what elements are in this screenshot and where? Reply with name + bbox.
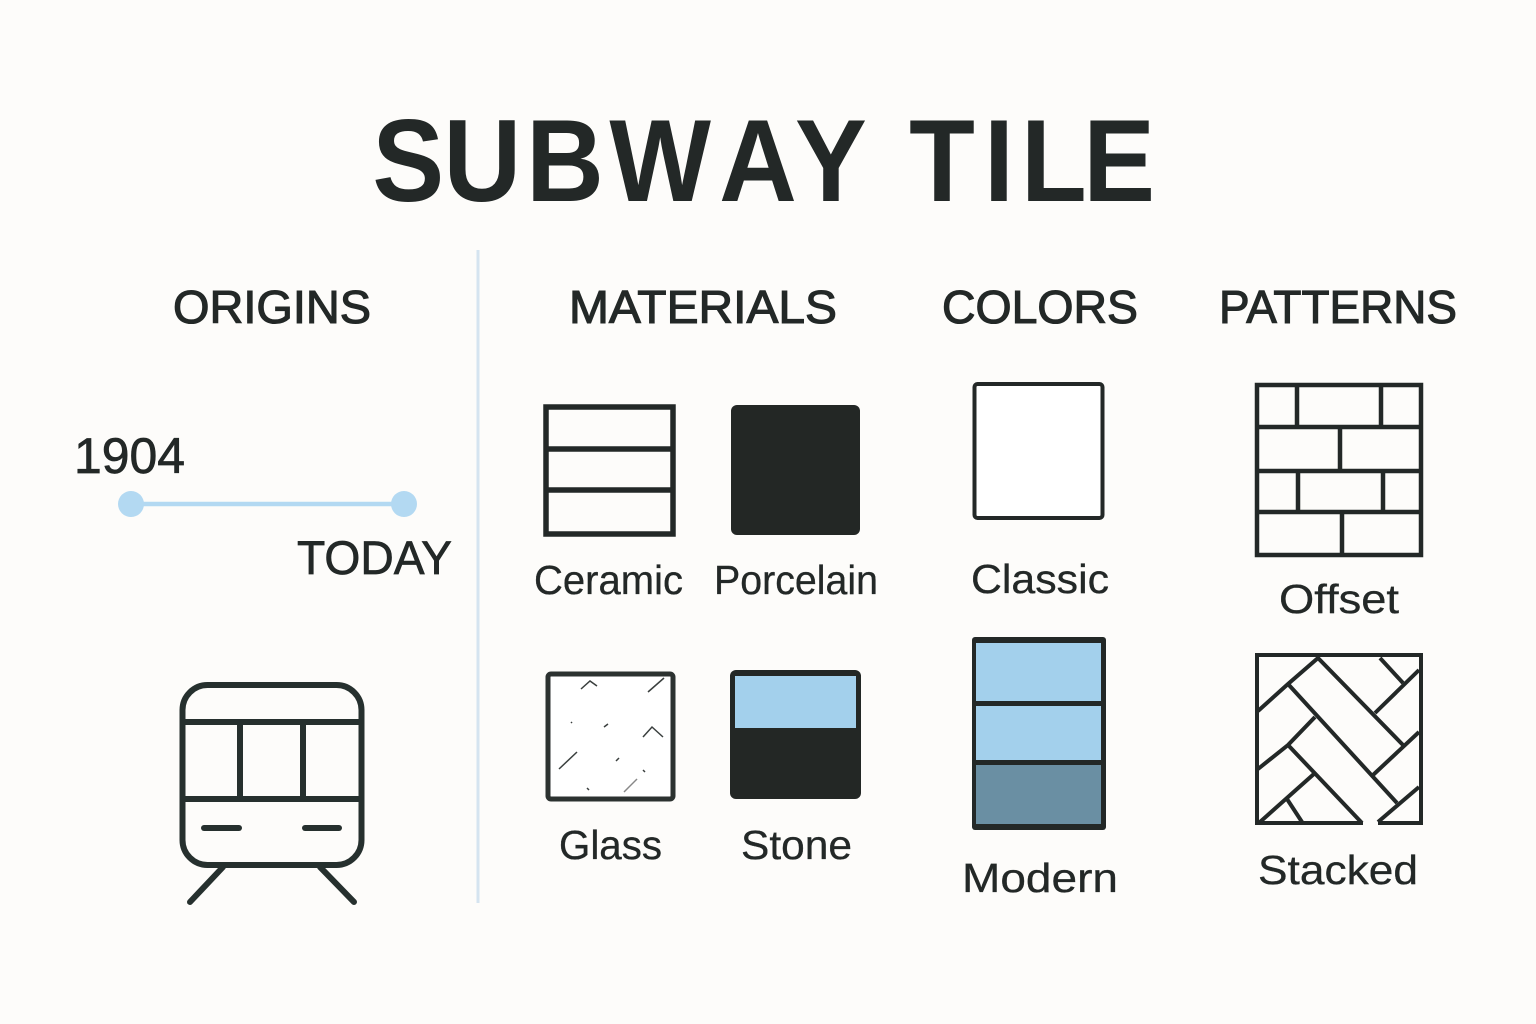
panel: materials [534,281,878,868]
label: modern: Modern [962,855,1118,901]
swatch: ceramic [546,407,673,534]
swatch: stone [730,670,861,799]
label: glass: Glass [559,822,662,868]
panel: origins [74,281,452,902]
label: stone: Stone [741,822,852,868]
pattern: stacked [1257,655,1421,823]
pattern: offset [1257,385,1421,555]
heading: patterns: PATTERNS [1219,281,1457,333]
panel: patterns [1219,281,1457,893]
timeline: 1904 to today [74,428,452,584]
label: stacked: Stacked [1258,847,1418,893]
swatch: glass [548,674,673,799]
timeline start year: 1904 [74,428,185,484]
title: SUBWAY TILE [372,95,1155,226]
divider between origins and the tile columns [476,250,480,903]
swatch: porcelain [731,405,860,535]
panel: colors [942,281,1138,901]
swatch: classic [974,384,1102,518]
label: ceramic: Ceramic [534,557,683,603]
heading: origins: ORIGINS [173,281,371,333]
heading: colors: COLORS [942,281,1138,333]
label: porcelain: Porcelain [714,557,878,603]
label: classic: Classic [971,556,1109,602]
label: offset: Offset [1279,576,1400,622]
icon: subway train [182,685,362,902]
heading: materials: MATERIALS [569,281,837,333]
timeline end label: TODAY [297,531,452,584]
swatch: modern [972,637,1106,830]
